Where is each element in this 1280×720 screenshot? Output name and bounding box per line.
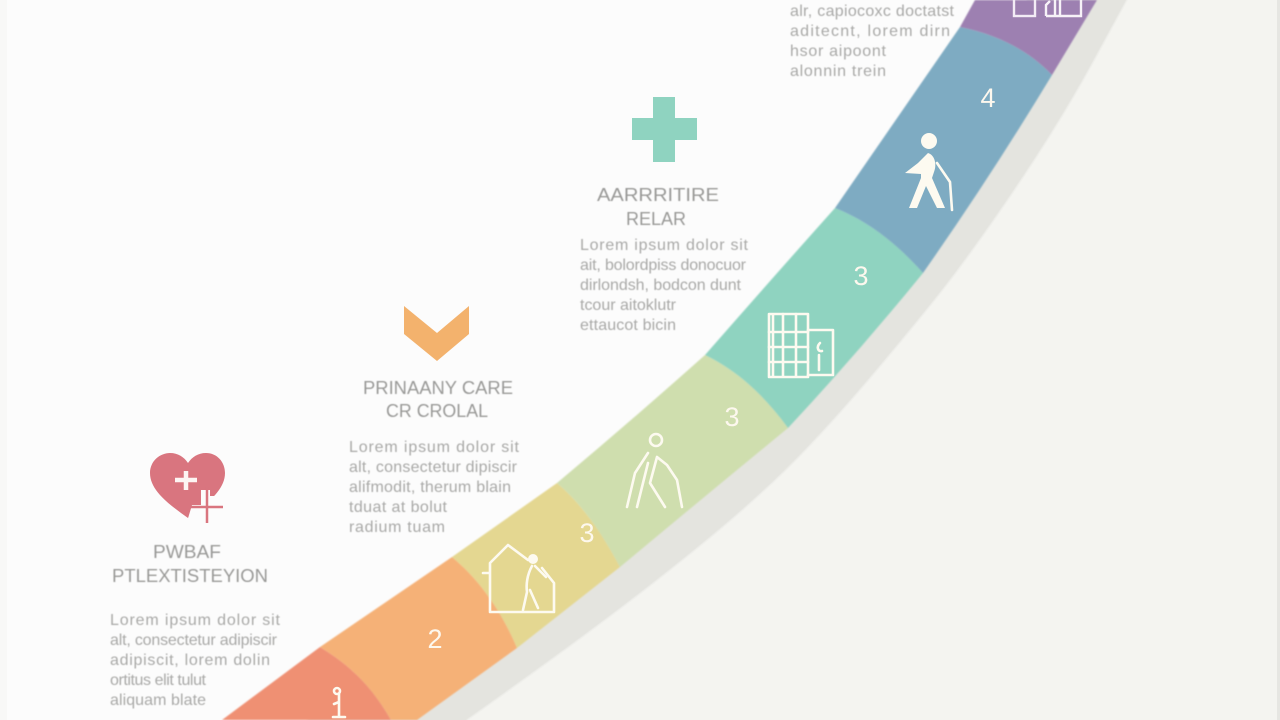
text block: primary care: tduat at bolut — [349, 499, 448, 516]
text block: third step: Lorem ipsum dolor sit — [580, 237, 749, 254]
icon: step 1 figure — [333, 688, 345, 717]
text block: third step: tcour aitoklutr — [580, 297, 677, 314]
icon: orange chevron — [404, 306, 469, 361]
text block: step one: ortitus elit tulut — [110, 672, 207, 689]
text block: top step: alonnin trein — [790, 63, 886, 80]
step numbers — [427, 83, 996, 654]
text block: primary care: radium tuam — [349, 519, 445, 536]
text block: primary care — [349, 439, 520, 536]
text block: top step: alr, capiocoxc doctatst — [790, 3, 955, 20]
heading: primary care — [363, 378, 513, 421]
segment 4: light green — [557, 355, 788, 567]
icon: teal cross — [632, 97, 697, 162]
heading: primary care: CR CROLAL — [386, 401, 488, 421]
heading: step one: PTLEXTISTEYION — [112, 566, 268, 586]
text block: primary care: Lorem ipsum dolor sit — [349, 439, 520, 456]
icon: heart with plus signs — [150, 453, 226, 525]
segment 6: blue — [835, 27, 1052, 273]
text block: third step: ait, bolordpiss donocuor — [580, 257, 747, 274]
text block: top step — [790, 3, 955, 80]
text block: step one: alt, consectetur adipiscir — [110, 632, 278, 649]
text block: step one: adipiscit, lorem dolin — [110, 652, 270, 669]
icon: hospital building — [769, 314, 833, 377]
step numbers: 3 — [724, 402, 740, 432]
text block: primary care: alt, consectetur dipiscir — [349, 459, 518, 476]
heading: third step: RELAR — [626, 209, 686, 229]
text block: top step: aditecnt, lorem dirn — [790, 23, 950, 40]
step numbers: 2 — [427, 624, 443, 654]
text block: top step: hsor aipoont — [790, 43, 887, 60]
icon: walking figure outline — [627, 434, 682, 507]
curved grey shadow band — [300, 0, 1127, 720]
segment 2: orange — [320, 557, 517, 720]
text block: step one — [110, 612, 281, 709]
text block: third step: dirlondsh, bodcon dunt — [580, 277, 742, 294]
icon: house with person — [483, 545, 554, 612]
heading: step one: PWBAF — [153, 542, 221, 562]
icon: clipped top doors — [1014, 0, 1081, 16]
text block: third step — [580, 237, 749, 334]
step numbers: 3 — [579, 518, 595, 548]
step numbers: 4 — [980, 83, 996, 113]
text block: third step: ettaucot bicin — [580, 317, 676, 334]
segment 7: purple — [960, 0, 1097, 75]
segment 5: teal — [705, 208, 923, 428]
segment 1: coral — [222, 647, 391, 720]
segment 3: yellow — [452, 483, 620, 648]
text block: primary care: alifmodit, therum blain — [349, 479, 511, 496]
heading: primary care: PRINAANY CARE — [363, 378, 513, 398]
curved pathway band — [222, 0, 1097, 720]
heading: step one — [112, 542, 268, 586]
icon: person with cane — [905, 133, 952, 210]
text block: step one: Lorem ipsum dolor sit — [110, 612, 281, 629]
heading: third step — [597, 185, 719, 229]
text block: step one: aliquam blate — [110, 692, 206, 709]
step numbers: 3 — [853, 261, 869, 291]
heading: third step: AARRRITIRE — [597, 185, 719, 205]
